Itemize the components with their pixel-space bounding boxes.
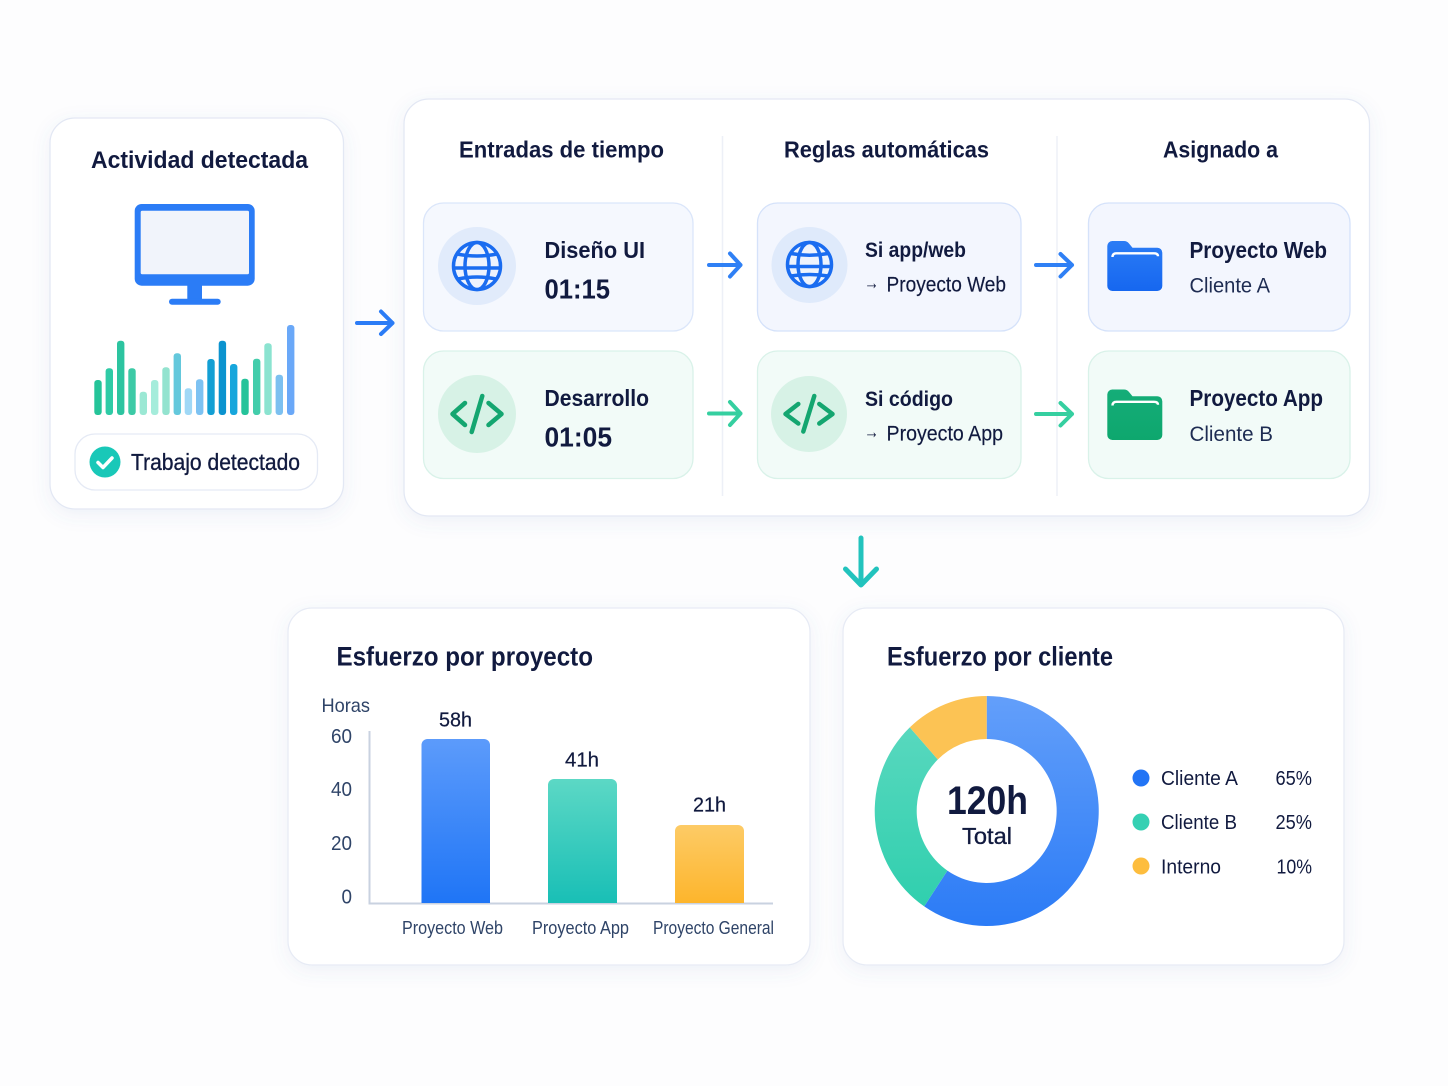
panel: esfuerzo por proyecto [288,608,810,965]
arrow: flow down to charts [846,538,876,585]
panel: flujo de entradas, reglas y asignación [404,99,1370,516]
arrow: blue entry to rule [709,254,740,276]
card: proyecto web [1088,203,1350,331]
axis labels [322,695,370,908]
status pill: trabajo detectado [75,434,318,490]
text: proyecto web rule: → [864,273,879,294]
arrow: activity to entries [357,312,392,334]
bar: proyecto web 58h [402,710,503,938]
icon: blue folder [1107,241,1162,291]
segment: cliente A [924,696,1099,926]
text: proyecto web: Proyecto Web [1190,237,1327,263]
card: diseño UI [424,203,693,331]
label: Trabajo detectado [131,449,300,475]
icon: code [452,396,502,432]
bar: proyecto general 21h: 21h [693,794,726,816]
card: regla app/web [758,203,1021,331]
bar: proyecto app 41h: 41h [565,750,599,772]
heading: entradas de tiempo: Entradas de tiempo [459,136,664,162]
heading: esfuerzo por cliente: Esfuerzo por cliente [887,642,1113,672]
text: cliente B: Cliente B [1190,423,1273,446]
card: regla código [758,351,1021,478]
center label: Total [962,823,1012,849]
heading: asignado a: Asignado a [1163,136,1278,162]
icon: code [786,396,832,432]
text: proyecto web rule: Proyecto Web [886,274,1006,296]
legend: cliente B: 25% [1276,812,1312,834]
legend: interno: Interno [1161,856,1221,878]
legend [1132,768,1312,878]
text: proyecto app: Proyecto App [1190,385,1323,411]
segment: cliente B [875,727,947,906]
bar: proyecto app 41h: Proyecto App [532,918,629,938]
card: proyecto app [1088,351,1350,478]
heading: esfuerzo por proyecto: Esfuerzo por proyecto [336,642,593,672]
axis labels: Horas [322,695,370,717]
chart: activity bars [94,325,294,415]
icon: globe [454,242,500,290]
text: 01:15: 01:15 [544,274,610,304]
icon: check [90,446,120,478]
arrow: blue rule to project [1036,254,1072,276]
legend: cliente A: Cliente A [1161,768,1239,790]
bar: proyecto general 21h [653,794,774,938]
legend: cliente A [1132,768,1312,790]
donut chart: 120h total [875,696,1099,926]
legend: interno: 10% [1276,856,1312,878]
panel: esfuerzo por cliente [843,608,1344,965]
heading: reglas automáticas: Reglas automáticas [784,136,989,162]
icon: globe [788,242,832,286]
text: proyecto app rule: Proyecto App [886,422,1003,446]
text: cliente A: Cliente A [1190,274,1270,298]
bar: proyecto app 41h [532,750,629,938]
legend: cliente B [1132,812,1312,834]
bar: proyecto general 21h: Proyecto General [653,918,774,938]
card: desarrollo [424,351,693,478]
center value: 120h [947,779,1028,823]
text: 01:05: 01:05 [544,422,612,452]
segment: interno [910,696,987,760]
text: si app/web: Si app/web [865,238,966,262]
text: desarrollo: Desarrollo [544,385,649,411]
bar: proyecto web 58h: 58h [439,710,472,732]
arrow: green entry to rule [709,402,740,425]
icon: monitor [135,204,255,305]
text: proyecto app rule: → [864,422,879,443]
legend: cliente A: 65% [1276,768,1312,790]
axis labels: 60 [331,726,352,748]
axis labels: 40 [331,779,352,801]
panel: actividad detectada [50,118,344,509]
bar: proyecto web 58h: Proyecto Web [402,918,503,938]
legend: interno [1132,856,1312,878]
axis labels: 20 [331,833,352,855]
arrow: green rule to project [1036,403,1072,426]
heading: actividad detectada: Actividad detectada [91,147,309,174]
legend: cliente B: Cliente B [1161,812,1237,834]
axis labels: 0 [342,886,352,908]
text: si código: Si código [865,387,953,411]
text: diseño UI: Diseño UI [544,237,645,263]
icon: green folder [1107,390,1162,440]
bar chart: horas por proyecto [322,695,774,938]
